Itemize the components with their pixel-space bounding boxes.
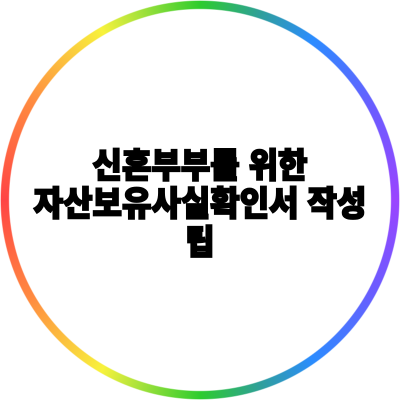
title: 자산보유사실확인서 작성	[34, 185, 366, 223]
title: 팁	[185, 223, 215, 261]
title	[32, 147, 366, 261]
title: 신혼부부를 위한	[92, 147, 307, 185]
